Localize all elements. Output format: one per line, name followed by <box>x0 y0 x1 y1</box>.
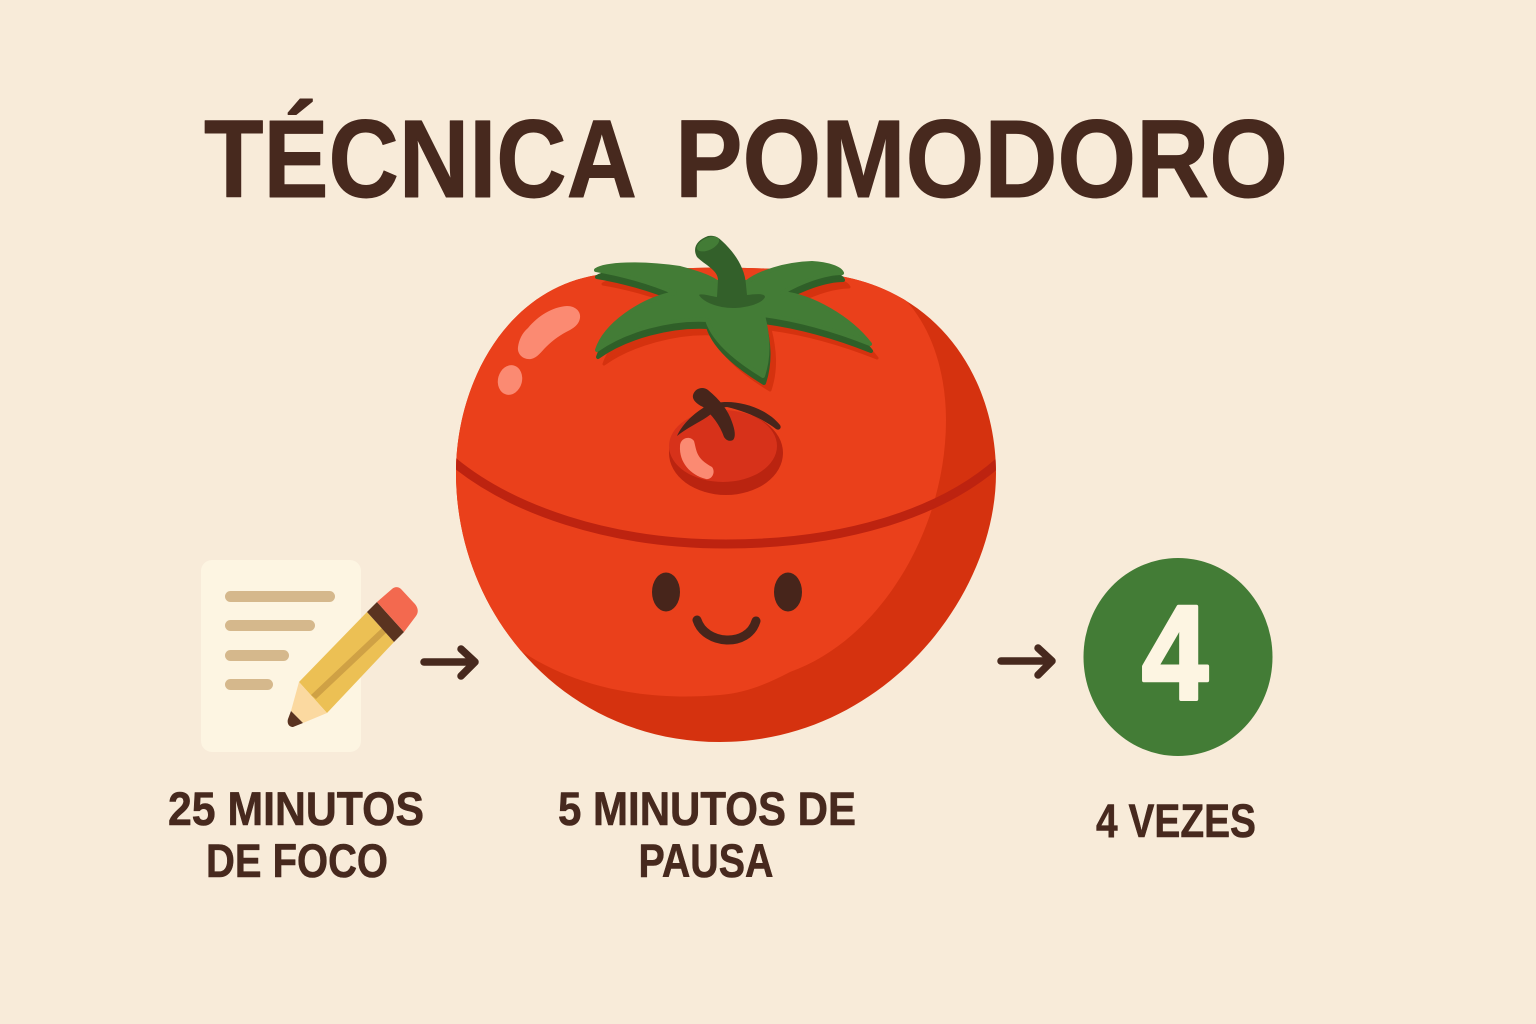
timer seam <box>450 459 1000 544</box>
knob <box>669 388 783 495</box>
label: 25 minutos de foco <box>168 782 424 887</box>
smile <box>697 620 756 640</box>
eye left <box>652 572 680 612</box>
label: 25 minutos de foco: DE FOCO <box>206 834 388 887</box>
icon: green circle with number 4 <box>1084 558 1272 756</box>
leaves <box>596 263 870 376</box>
icon: notepad with pencil <box>201 560 418 752</box>
highlight small <box>495 362 525 398</box>
title <box>204 98 1288 221</box>
icon: green circle with number 4: 4 <box>1142 579 1208 728</box>
tomato body light face <box>440 240 946 697</box>
pencil <box>288 587 418 727</box>
title: TÉCNICA <box>204 98 637 221</box>
leaves underside <box>597 270 871 383</box>
stem cap <box>695 233 721 255</box>
label: 5 minutos de pausa <box>558 782 856 887</box>
icon: tomato timer <box>440 233 1000 742</box>
label: 25 minutos de foco: 25 MINUTOS <box>168 782 424 835</box>
leaves shadow on tomato <box>603 277 877 390</box>
title: POMODORO <box>675 98 1288 221</box>
arrow: pause to repeat <box>1001 648 1052 675</box>
label: 5 minutos de pausa: PAUSA <box>638 834 774 887</box>
stem <box>695 236 765 308</box>
highlight large <box>518 306 580 359</box>
arrow: focus to pause <box>424 649 475 676</box>
eye right <box>774 572 802 612</box>
label: 4 vezes: 4 VEZES <box>1096 794 1256 847</box>
label: 5 minutos de pausa: 5 MINUTOS DE <box>558 782 856 835</box>
tomato body shade <box>456 268 996 742</box>
